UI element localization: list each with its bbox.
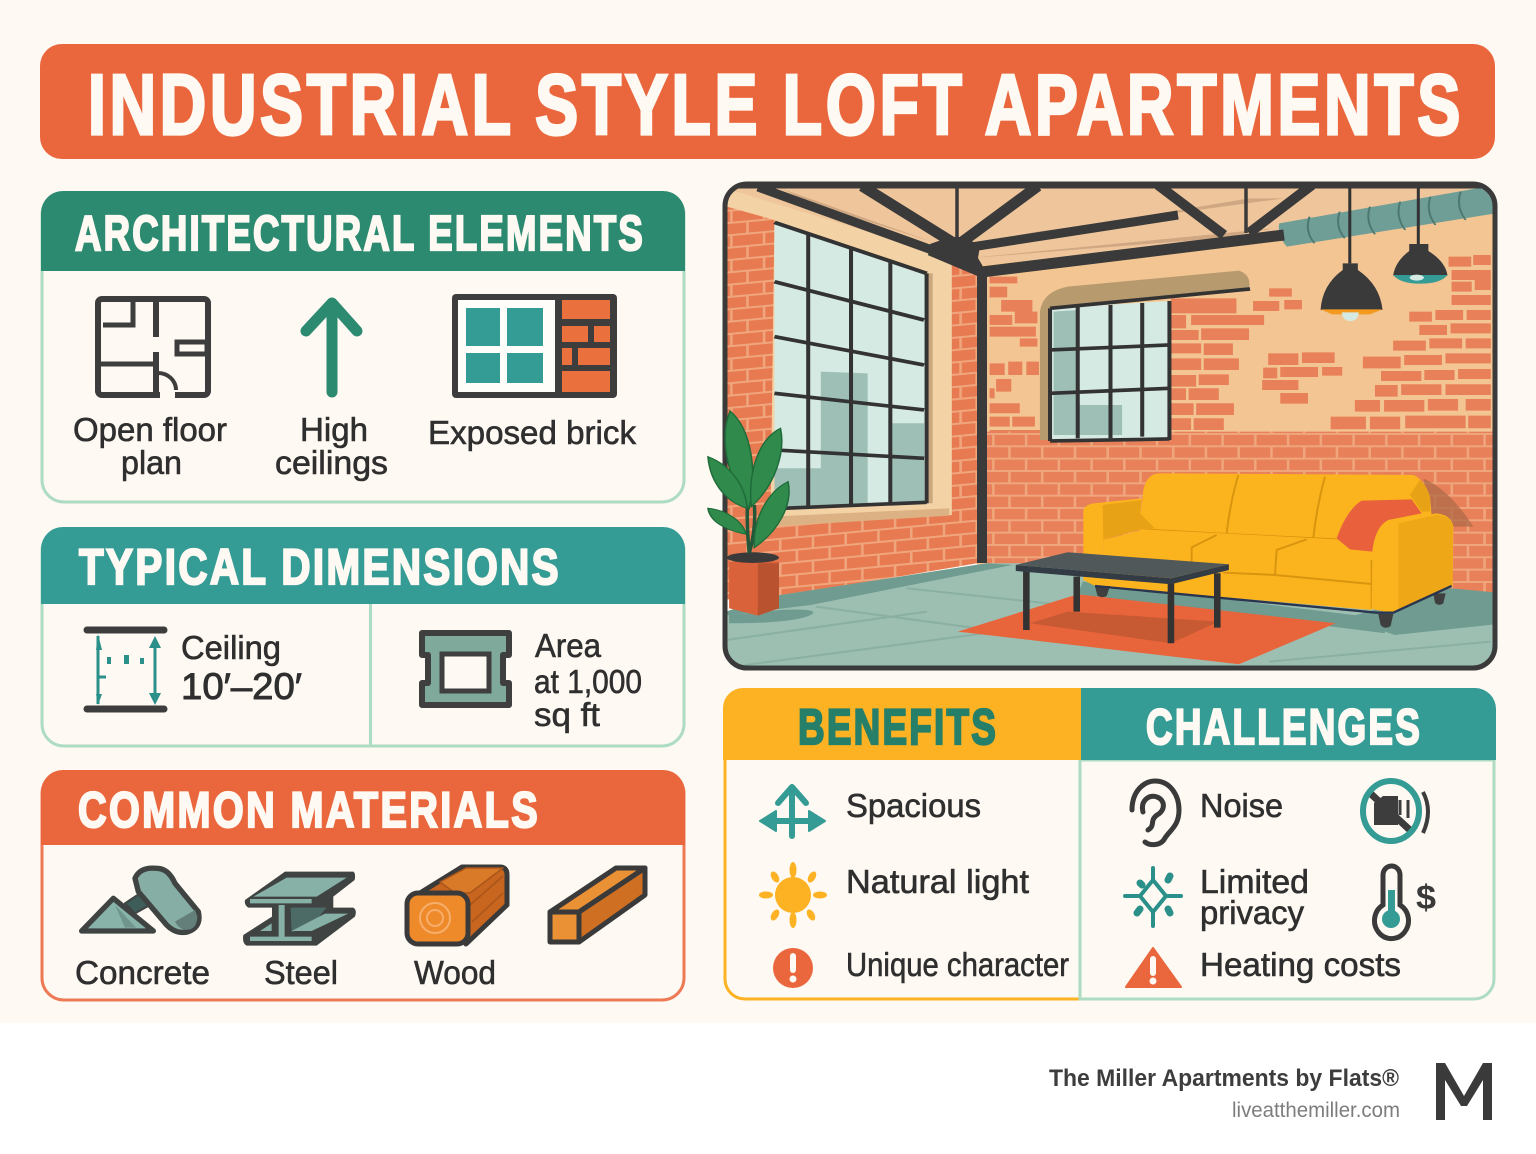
- left window: [774, 222, 927, 510]
- icon: high ceilings arrow: [306, 303, 357, 392]
- label: natural light: Natural light: [846, 863, 1029, 900]
- truss hub: [930, 237, 983, 266]
- label: limited privacy: Limited: [1200, 863, 1309, 900]
- icon: wood log: [407, 867, 507, 944]
- icon: steel beam: [243, 872, 356, 946]
- label: open floor plan: [73, 411, 227, 481]
- icon: floor area: [422, 633, 509, 705]
- icon: exposed brick window: [452, 294, 617, 398]
- icon: thermometer with dollar: [1374, 866, 1436, 939]
- label: ceiling height: 10′–20′: [181, 666, 302, 707]
- icon: sun: [759, 862, 827, 928]
- label: high ceilings: ceilings: [275, 444, 388, 481]
- label: high ceilings: [275, 411, 388, 481]
- left wall: [715, 195, 977, 600]
- footer brand text: [1049, 1065, 1400, 1122]
- label: exposed brick: Exposed brick: [428, 414, 637, 451]
- icon: open floor plan: [98, 299, 208, 395]
- icon: ceiling height: [87, 630, 164, 709]
- label: ceiling height: Ceiling: [181, 629, 281, 666]
- icon: unique character exclamation: [773, 948, 813, 988]
- panel: typical dimensions: [41, 527, 685, 746]
- pendant lamps: [1321, 185, 1448, 321]
- panel: architectural elements: [41, 191, 685, 502]
- footer logo M: [1436, 1063, 1492, 1120]
- floor: [728, 563, 1492, 666]
- illustration: loft interior: [708, 175, 1505, 675]
- exposed bricks: [990, 255, 1491, 440]
- label: open floor plan: Open floor: [73, 411, 227, 448]
- icon: ear: [1132, 781, 1179, 845]
- icon: concrete trowel: [82, 868, 199, 932]
- label: limited privacy: privacy: [1200, 894, 1304, 931]
- label: wood: Wood: [414, 954, 496, 991]
- label: limited privacy: [1200, 863, 1309, 931]
- back wall: [977, 214, 1492, 565]
- photo frame: [725, 184, 1495, 668]
- ceiling: [734, 188, 1476, 264]
- label: floor area: Area: [535, 627, 602, 664]
- icon: spacious arrows: [760, 787, 825, 836]
- heading: architectural elements: ARCHITECTURAL ELEMENTS: [75, 207, 645, 261]
- heading: benefits: BENEFITS: [798, 699, 998, 755]
- pot: [727, 552, 779, 616]
- label: unique character: Unique character: [846, 946, 1069, 983]
- small window glass: [1050, 289, 1250, 441]
- footer brand text: liveatthemiller.com: [1232, 1099, 1400, 1122]
- ventilation duct: [1279, 185, 1496, 247]
- icon: warning triangle: [1126, 948, 1181, 987]
- label: spacious: Spacious: [846, 787, 981, 824]
- label: noise: Noise: [1200, 787, 1283, 824]
- rug: [958, 594, 1336, 664]
- coffee table: [1016, 552, 1229, 643]
- label: ceiling height: [181, 629, 302, 707]
- scene foreground: [727, 185, 1496, 643]
- label: steel: Steel: [264, 954, 338, 991]
- heading: common materials: COMMON MATERIALS: [78, 782, 540, 838]
- heading: challenges: CHALLENGES: [1146, 699, 1422, 755]
- icon: wood beam: [550, 868, 645, 942]
- label: floor area: [534, 627, 642, 733]
- small window arch: [1040, 271, 1249, 440]
- plant: [708, 411, 789, 553]
- icon: limited privacy: [1125, 868, 1181, 926]
- label: concrete: Concrete: [75, 954, 210, 991]
- steel trusses: [725, 185, 1495, 563]
- panel: benefits and challenges: [723, 688, 1496, 999]
- label: floor area: at 1,000: [534, 663, 642, 700]
- label: heating costs: Heating costs: [1200, 946, 1401, 983]
- sofa: [1083, 473, 1473, 628]
- icon: no noise: [1363, 781, 1428, 841]
- label: open floor plan: plan: [121, 444, 182, 481]
- panel: common materials: [41, 770, 685, 1000]
- footer brand text: The Miller Apartments by Flats®: [1049, 1065, 1399, 1092]
- lower brick wall: [987, 432, 1505, 598]
- label: floor area: sq ft: [534, 696, 600, 733]
- label: dollar sign: $: [1416, 879, 1436, 917]
- label: high ceilings: High: [300, 411, 368, 448]
- heading: typical dimensions: TYPICAL DIMENSIONS: [79, 539, 561, 595]
